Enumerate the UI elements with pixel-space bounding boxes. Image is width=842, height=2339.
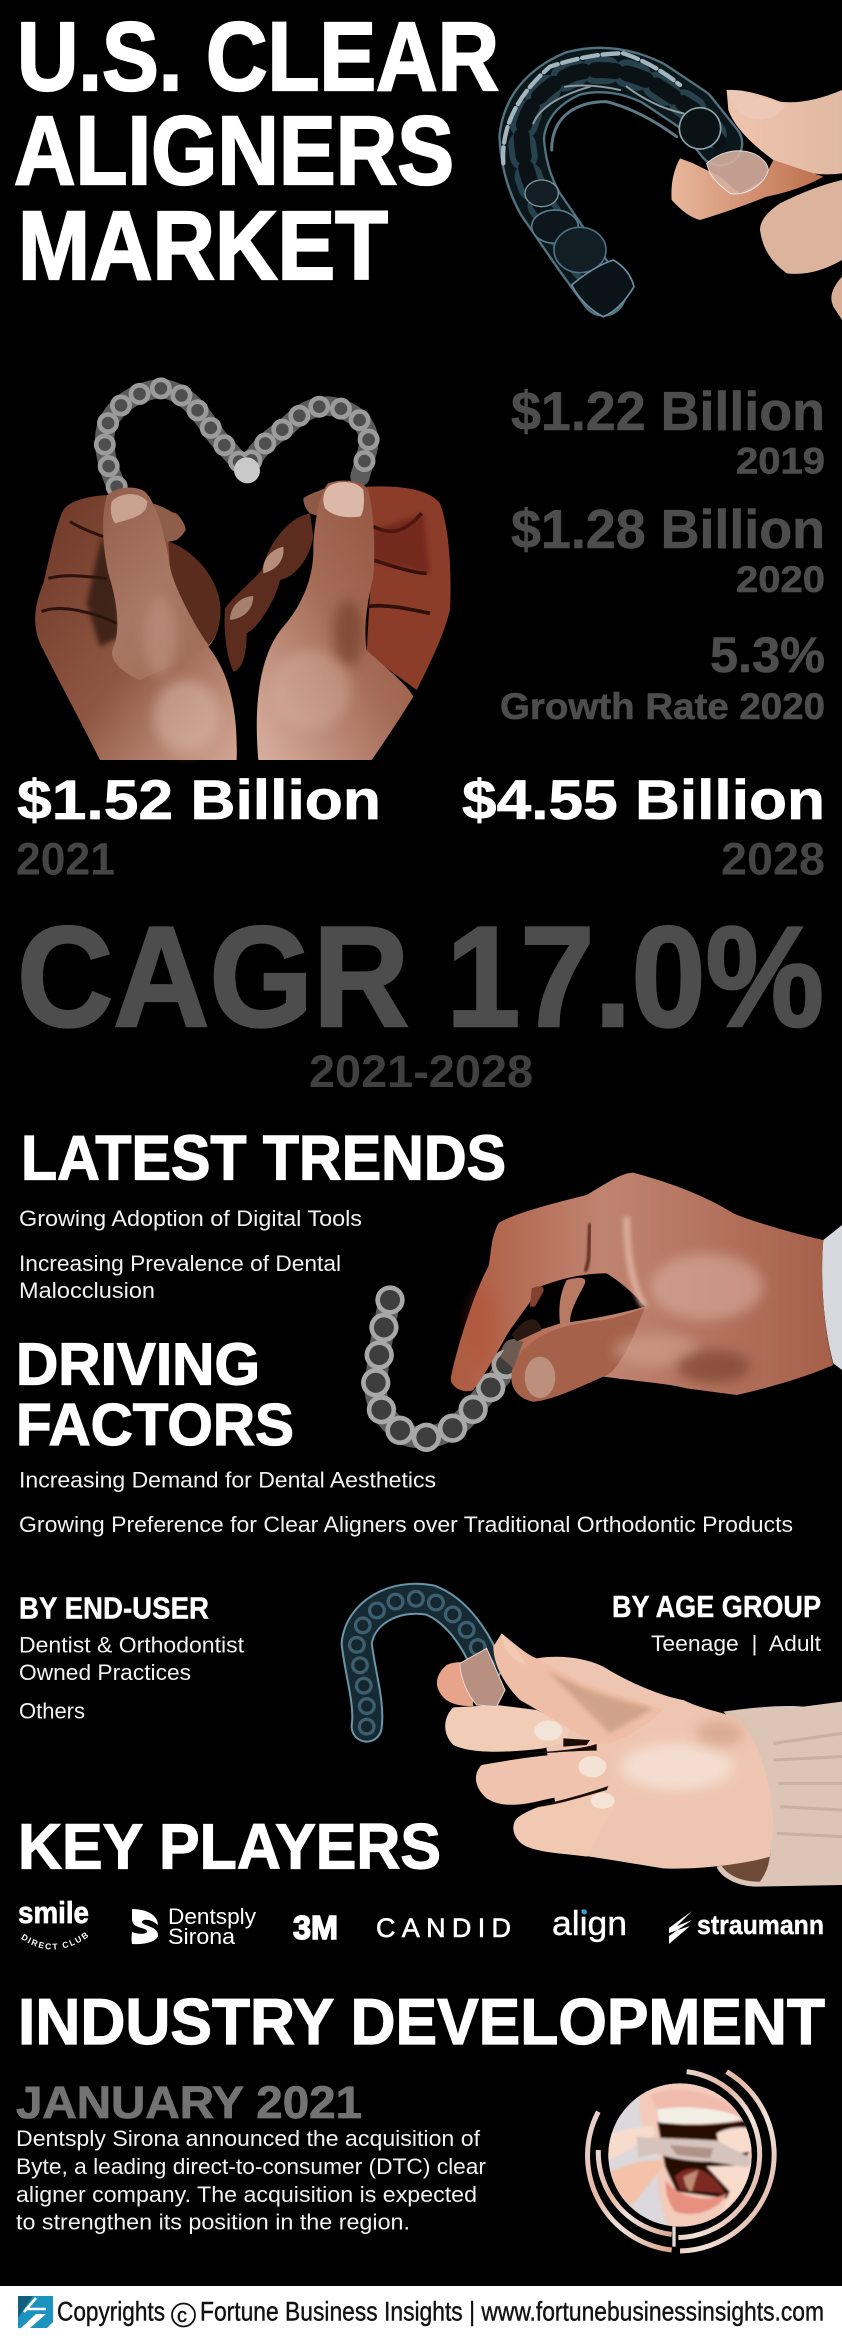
stat: 2019 market size (511, 380, 825, 482)
aligner (357, 1599, 487, 1727)
stat: growth rate 2020: Growth Rate 2020 (500, 686, 825, 727)
logo: fortune business insights (18, 2296, 53, 2328)
logo: dentsply sirona (132, 1904, 256, 1949)
stat: 2020 market size: $1.28 Billion (511, 498, 825, 560)
image: heart aligner held by two hands (35, 388, 451, 760)
title: MARKET (18, 191, 388, 300)
industry development date: JANUARY 2021 (16, 2077, 362, 2128)
heading: key players: KEY PLAYERS (18, 1810, 441, 1882)
title: ALIGNERS (14, 96, 454, 205)
logo: candid: CANDID (376, 1913, 511, 1943)
sleeve (717, 1702, 842, 1887)
logo: align: align (552, 1905, 627, 1943)
right hand (225, 481, 451, 760)
list: latest trends: Growing Adoption of Digital Tools (19, 1206, 362, 1231)
index finger (445, 1705, 570, 1752)
logo: 3M: 3M (293, 1909, 338, 1946)
logo: smile direct club: smile (18, 1895, 89, 1930)
stat: 2028 market size: 2028 (721, 834, 825, 884)
stat: 2021 market size: $1.52 Billion (17, 768, 381, 831)
title (14, 2, 499, 300)
aligner (376, 1300, 513, 1437)
logo: dentsply sirona: Dentsply (168, 1904, 256, 1929)
ring finger (513, 1793, 617, 1857)
mouth photo (607, 2082, 757, 2228)
stat: growth rate 2020 (500, 627, 825, 727)
heading: driving factors: DRIVING (16, 1332, 260, 1398)
list: driving factors: Growing Preference for Clear Aligners over Traditional Orthodontic Products (19, 1512, 793, 1537)
stat: 2020 market size (511, 498, 825, 600)
image: aligner held by fingers (503, 53, 842, 320)
image: hand holding aligner with sleeve (357, 1599, 842, 1887)
title: U.S. CLEAR (17, 2, 499, 111)
segment: by end-user (19, 1590, 245, 1724)
image: circular mouth photo with rings (588, 2072, 774, 2251)
heading: industry development: INDUSTRY DEVELOPMENT (18, 1985, 825, 2058)
cuff (822, 1225, 842, 1370)
stat: 2020 market size: 2020 (736, 559, 825, 600)
segment: by age group (612, 1589, 822, 1656)
stat: 2019 market size: $1.22 Billion (511, 380, 825, 442)
logo: straumann (669, 1910, 824, 1944)
stat: growth rate 2020: 5.3% (710, 627, 825, 683)
segment: by end-user: Dentist & Orthodontist (19, 1632, 245, 1658)
hand (437, 1633, 773, 1869)
industry development text: Dentsply Sirona announced the acquisition of (16, 2126, 481, 2151)
segment: by age group: Teenage | Adult (651, 1631, 822, 1656)
industry development text: Byte, a leading direct-to-consumer (DTC) clear (16, 2154, 487, 2179)
list: driving factors (19, 1468, 793, 1537)
heading: latest trends: LATEST TRENDS (21, 1124, 506, 1194)
list: latest trends (19, 1206, 362, 1303)
footer copyright text: Copyrights (57, 2296, 165, 2326)
segment: by end-user: Others (19, 1698, 85, 1724)
footer copyright text: c (177, 2305, 187, 2327)
thumb (493, 1633, 663, 1744)
heading: driving factors: FACTORS (16, 1392, 294, 1458)
segment: by end-user: BY END-USER (19, 1590, 209, 1626)
list: latest trends: Increasing Prevalence of Dental (19, 1251, 341, 1276)
list: driving factors: Increasing Demand for Dental Aesthetics (19, 1468, 436, 1492)
industry development text (16, 2126, 487, 2234)
logo: dentsply sirona: Sirona (168, 1924, 236, 1949)
logo: smile direct club: DIRECT CLUB (21, 1932, 88, 1950)
stat: CAGR: 2021-2028 (309, 1046, 533, 1097)
left hand (35, 488, 237, 760)
stat: 2019 market size: 2019 (736, 440, 825, 482)
finger gaps (527, 1738, 608, 1807)
stat: 2028 market size: $4.55 Billion (462, 768, 825, 831)
stat: 2028 market size (462, 768, 825, 884)
rings (588, 2072, 774, 2251)
heart aligner (105, 388, 369, 487)
footer bar (0, 2286, 842, 2339)
industry development text: to strengthen its position in the region. (16, 2210, 410, 2234)
stat: 2021 market size (16, 768, 381, 884)
pinky tip (437, 1662, 473, 1706)
logo: straumann: straumann (697, 1910, 824, 1940)
hand (451, 1173, 833, 1402)
industry development text: aligner company. The acquisition is expected (16, 2182, 477, 2207)
stat: 2021 market size: 2021 (16, 834, 115, 884)
list: latest trends: Malocclusion (19, 1278, 155, 1303)
logo: smile direct club (18, 1895, 89, 1950)
heading: driving factors (16, 1332, 294, 1458)
segment: by end-user: Owned Practices (19, 1660, 191, 1685)
middle finger (476, 1754, 607, 1805)
image: hand holding aligner (376, 1173, 842, 1437)
